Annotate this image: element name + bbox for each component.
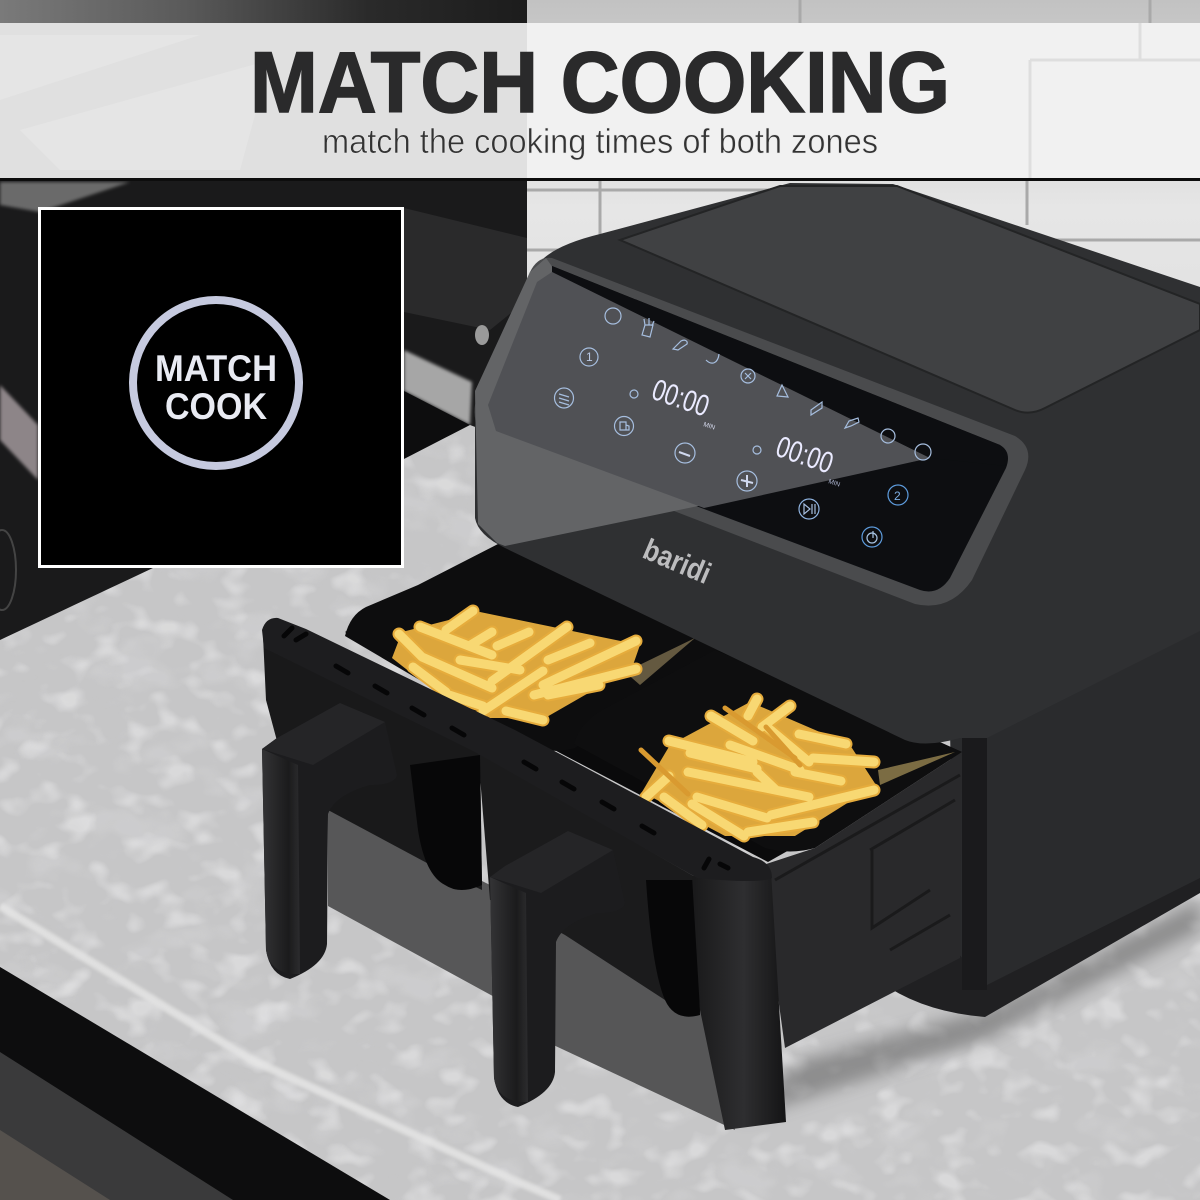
- panel numerals: [586, 350, 901, 503]
- title: MATCH COOKING: [250, 35, 950, 131]
- dark wall right: [478, 752, 700, 1012]
- subtitle: match the cooking times of both zones: [322, 123, 878, 161]
- drawer front frame: [262, 618, 786, 1130]
- tray reflection 1: [625, 638, 695, 685]
- min label 1: MIN: [702, 421, 716, 432]
- button label: MATCH: [155, 348, 277, 389]
- frame leg right: [692, 871, 786, 1130]
- panel numerals: 1: [586, 350, 593, 364]
- lid: [620, 186, 1200, 413]
- panel icons: [554, 308, 931, 547]
- side wall embossing: [775, 775, 960, 950]
- control panel glass: [487, 266, 1008, 592]
- air fryer: [345, 183, 1200, 1048]
- inset: match cook button: [40, 208, 402, 566]
- background: tile wall: [527, 0, 1200, 520]
- button label: COOK: [165, 386, 267, 427]
- panel numerals: 2: [894, 489, 901, 503]
- frame top bar: [262, 618, 772, 881]
- background: dark kitchen and hob: [0, 0, 527, 640]
- handle right: [490, 831, 625, 1107]
- right basket: [574, 650, 962, 852]
- timer display 2: 00:00: [772, 430, 837, 481]
- lower body: [950, 620, 1200, 990]
- button ring: [133, 300, 299, 466]
- countertop: [0, 420, 1200, 1200]
- reflection on bezel and face: [475, 258, 930, 546]
- left basket: [345, 543, 720, 751]
- inner recess left: [410, 755, 482, 890]
- inner recess right: [646, 880, 700, 1017]
- button label: [155, 348, 277, 427]
- upper shell: [475, 183, 1200, 744]
- drawer backing: [345, 543, 962, 862]
- fries left basket: [392, 611, 640, 720]
- min label 2: MIN: [827, 478, 841, 489]
- reflection on glass: [488, 272, 930, 508]
- timer display 1: 00:00: [648, 373, 713, 424]
- tray reflection 2: [878, 752, 955, 785]
- counter front edge: [0, 967, 390, 1200]
- handle left: [262, 703, 397, 979]
- brand logo: baridi: [638, 533, 716, 591]
- shadow under air fryer: [740, 900, 1200, 1120]
- fries right basket: [641, 699, 876, 836]
- header banner: [0, 23, 1200, 181]
- translucent pane right: [500, 880, 735, 1130]
- dark wall left: [263, 636, 482, 890]
- knob: [475, 325, 489, 345]
- dark glass strip: [552, 266, 1006, 466]
- translucent pane left: [328, 800, 500, 1000]
- control panel bezel: [475, 258, 1028, 606]
- base foot: [885, 878, 1200, 1017]
- vertical seam band: [962, 738, 987, 990]
- bar slots: [284, 628, 728, 868]
- drawer side wall: [760, 752, 962, 1048]
